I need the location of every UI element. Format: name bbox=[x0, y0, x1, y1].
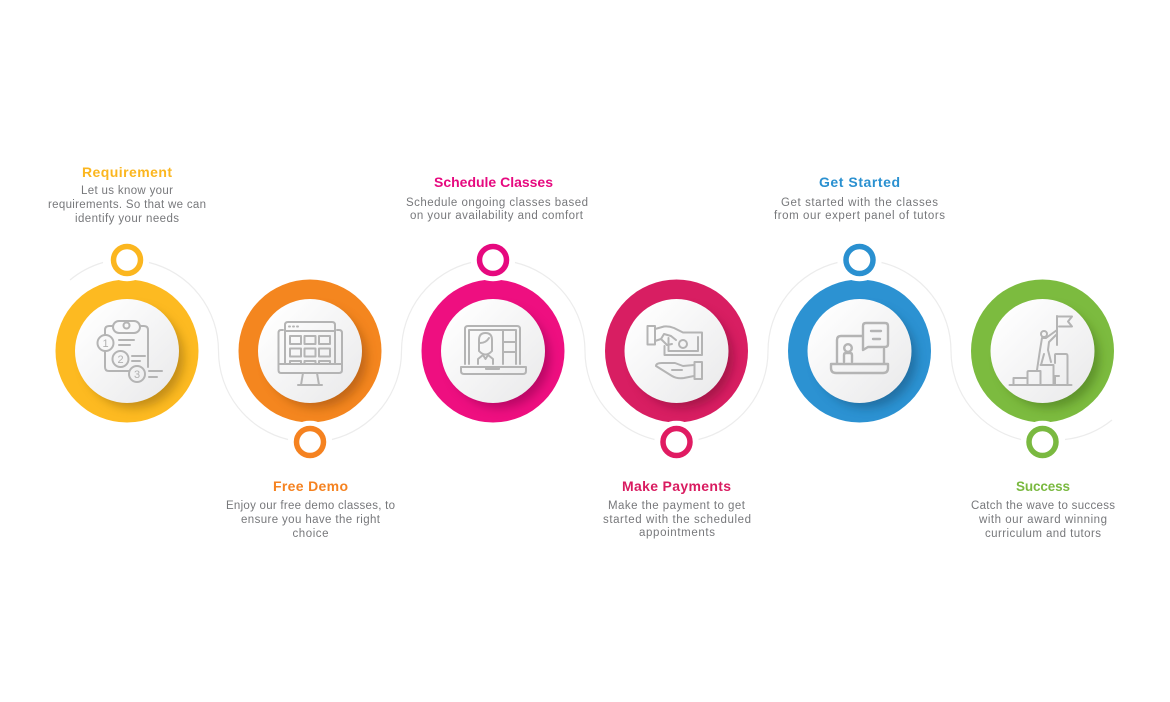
step 2: free demo bbox=[226, 280, 395, 540]
marker ring: requirement bbox=[114, 246, 140, 274]
icon: laptop with chat bubble bbox=[831, 323, 888, 373]
text: get started description: from our expert panel of tutors bbox=[774, 210, 945, 222]
text: free demo description: Enjoy our free demo classes, to bbox=[226, 500, 395, 512]
heading: free demo: Free Demo bbox=[273, 478, 348, 494]
marker ring: make payments bbox=[663, 428, 690, 456]
icon: climber with flag bbox=[1010, 316, 1072, 385]
text: free demo description: ensure you have the right bbox=[241, 514, 381, 526]
circle badge: get started bbox=[788, 277, 931, 422]
icon: monitor with grid bbox=[278, 322, 342, 385]
step 1: requirement bbox=[48, 164, 206, 422]
text: schedule classes description: on your availability and comfort bbox=[410, 210, 584, 222]
icon: numbered clipboard bbox=[98, 321, 162, 382]
text: make payments description: appointments bbox=[639, 527, 715, 539]
step 6: success bbox=[971, 280, 1115, 540]
step 4: make payments bbox=[603, 280, 751, 539]
circle badge: success bbox=[971, 280, 1114, 425]
icon: numbered clipboard: 1 bbox=[102, 338, 109, 350]
text: schedule classes description bbox=[406, 197, 588, 222]
text: requirement description bbox=[48, 185, 206, 225]
circle badge: free demo bbox=[238, 280, 382, 425]
icon: laptop with tutor bbox=[461, 326, 526, 374]
text: success description: Catch the wave to success bbox=[971, 500, 1115, 512]
text: requirement description: requirements. So that we can bbox=[48, 199, 206, 211]
heading: get started: Get Started bbox=[819, 174, 900, 190]
text: make payments description: started with the scheduled bbox=[603, 514, 751, 526]
icon: numbered clipboard: 3 bbox=[134, 369, 140, 381]
text: make payments description: Make the payment to get bbox=[608, 500, 746, 512]
marker ring: success bbox=[1029, 428, 1056, 456]
text: get started description: Get started with the classes bbox=[781, 197, 938, 209]
marker ring: get started bbox=[846, 246, 873, 274]
text: get started description bbox=[774, 197, 945, 222]
text: requirement description: Let us know your bbox=[81, 185, 173, 197]
text: requirement description: identify your needs bbox=[75, 213, 179, 225]
text: success description bbox=[971, 500, 1115, 540]
icon: hands exchanging money bbox=[648, 326, 702, 379]
circle badge: make payments bbox=[605, 280, 748, 425]
heading: make payments: Make Payments bbox=[622, 478, 731, 494]
text: make payments description bbox=[603, 500, 751, 539]
marker ring: free demo bbox=[296, 428, 324, 456]
heading: success: Success bbox=[1016, 479, 1070, 494]
heading: requirement: Requirement bbox=[82, 164, 172, 180]
connecting wave line bbox=[70, 262, 1112, 440]
circle badge: schedule classes bbox=[422, 277, 564, 422]
heading: schedule classes: Schedule Classes bbox=[434, 174, 553, 190]
step 5: get started bbox=[774, 174, 945, 422]
text: schedule classes description: Schedule ongoing classes based bbox=[406, 197, 588, 209]
text: free demo description: choice bbox=[292, 528, 328, 540]
text: success description: with our award winning bbox=[978, 514, 1107, 526]
icon: numbered clipboard: 2 bbox=[117, 354, 124, 366]
step 3: schedule classes bbox=[406, 174, 588, 422]
text: success description: curriculum and tutors bbox=[985, 528, 1101, 540]
text: free demo description bbox=[226, 500, 395, 540]
circle badge: requirement bbox=[56, 277, 198, 422]
marker ring: schedule classes bbox=[480, 246, 506, 274]
